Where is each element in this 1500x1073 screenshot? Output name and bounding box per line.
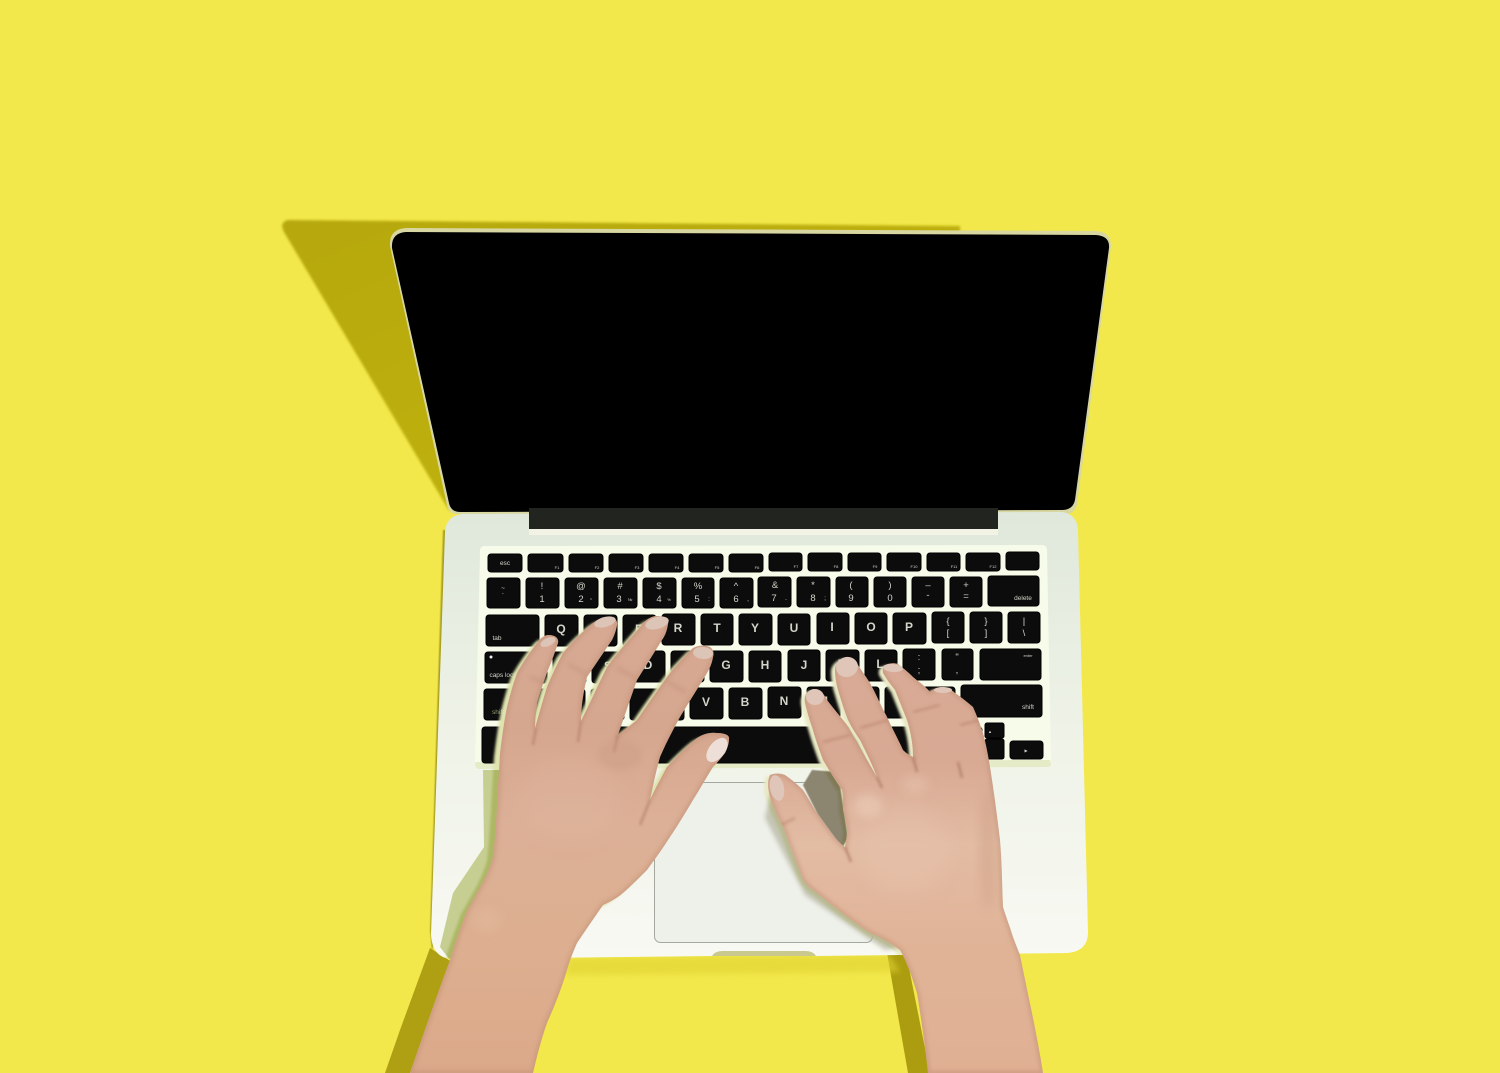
- scene: laptop and hands on yellow: [281, 218, 1111, 1073]
- number row: 5: [694, 594, 700, 605]
- number row: ;: [824, 595, 826, 602]
- function row: F3: [635, 565, 640, 570]
- qwerty row: I: [830, 620, 834, 634]
- home row: :: [918, 652, 920, 663]
- function row: F9: [873, 564, 878, 569]
- home row: caps lock: [489, 672, 517, 679]
- number row: 7: [771, 593, 777, 604]
- qwerty row: |: [1023, 616, 1025, 627]
- function row: [488, 552, 1039, 572]
- bottom letter row: M: [818, 694, 828, 708]
- qwerty row: R: [674, 621, 683, 635]
- function row: F10: [911, 564, 918, 569]
- number row: 3: [616, 594, 622, 605]
- qwerty row: U: [790, 621, 798, 635]
- number row: ,: [747, 596, 749, 603]
- front notch: [712, 951, 816, 956]
- number row: 6: [733, 594, 739, 605]
- number row: ~: [501, 585, 505, 592]
- home row: [485, 649, 1041, 683]
- number row: %: [667, 597, 671, 602]
- qwerty row: E: [635, 622, 643, 636]
- qwerty row: P: [905, 620, 913, 634]
- bottom letter row: shift: [492, 709, 504, 716]
- number row: delete: [1014, 595, 1032, 602]
- number row: 9: [848, 593, 854, 604]
- home row: ;: [918, 665, 920, 676]
- qwerty row: [486, 612, 1040, 646]
- qwerty row: Y: [751, 621, 759, 635]
- shadows under laptop and arms: [385, 530, 930, 1073]
- number row: !: [541, 581, 543, 592]
- right hand nails: [767, 654, 952, 802]
- qwerty row: \: [1023, 628, 1026, 639]
- number row: (: [849, 580, 853, 591]
- bottom letter row: shift: [1022, 704, 1034, 711]
- trackpad: [654, 782, 872, 942]
- bottom letter row: B: [741, 695, 750, 709]
- qwerty row: W: [594, 622, 606, 636]
- qwerty row: Q: [556, 622, 566, 636]
- function row: F6: [755, 565, 760, 570]
- number row: ^: [734, 581, 739, 592]
- home row: H: [761, 658, 769, 672]
- home row: K: [838, 657, 847, 671]
- space row and arrows: [482, 723, 1043, 763]
- number row: #: [617, 581, 623, 592]
- number row: -: [926, 590, 930, 601]
- laptop base: [431, 508, 1088, 959]
- number row: +: [963, 580, 969, 591]
- number row: №: [628, 597, 632, 602]
- qwerty row: tab: [492, 635, 502, 642]
- number row: .: [785, 595, 787, 602]
- home row: S: [604, 659, 612, 673]
- qwerty row: T: [713, 621, 721, 635]
- number row: `: [502, 593, 504, 600]
- space row and arrows: ▶: [1024, 748, 1028, 753]
- bottom letter row: [484, 685, 1042, 720]
- qwerty row: ]: [985, 628, 987, 639]
- bottom letter row: N: [780, 694, 788, 708]
- keyboard keys: [482, 552, 1043, 763]
- number row: 2: [578, 594, 584, 605]
- black screen: [392, 232, 1109, 512]
- function row: F8: [834, 564, 839, 569]
- lid rim: [390, 228, 1111, 514]
- keyboard well: [475, 545, 1051, 769]
- function row: F5: [715, 565, 720, 570]
- number row: –: [925, 580, 931, 591]
- hand cast shadows on laptop: [440, 618, 939, 959]
- number row: $: [656, 581, 662, 592]
- home row: ": [955, 652, 959, 663]
- number row: :: [708, 596, 710, 603]
- right hand: [767, 654, 1043, 1073]
- home row: enter: [1023, 653, 1033, 658]
- space row and arrows: ▲: [988, 729, 992, 734]
- function row: F11: [951, 564, 958, 569]
- qwerty row: {: [946, 616, 950, 627]
- hinge: [529, 508, 998, 529]
- home row: ,: [956, 665, 958, 676]
- qwerty row: [: [947, 628, 950, 639]
- left hand nails: [539, 614, 732, 766]
- function row: F1: [555, 565, 560, 570]
- function row: F12: [990, 564, 997, 569]
- number row: %: [694, 581, 703, 592]
- number row: 8: [810, 593, 816, 604]
- number row: 1: [539, 594, 545, 605]
- function row: F4: [675, 565, 680, 570]
- home row: F: [683, 658, 691, 672]
- number row: 0: [887, 593, 893, 604]
- bottom letter row: V: [702, 695, 710, 709]
- function row: esc: [500, 560, 511, 567]
- number row: *: [811, 580, 815, 591]
- home row: L: [876, 657, 884, 671]
- number row: =: [963, 591, 969, 602]
- home row: D: [644, 658, 653, 672]
- left hand: [410, 614, 732, 1073]
- lid cast shadow: [282, 220, 960, 512]
- number row: =: [590, 596, 593, 601]
- qwerty row: O: [866, 620, 876, 634]
- home row: A: [565, 659, 574, 673]
- home row: G: [721, 658, 731, 672]
- function row: F7: [794, 564, 799, 569]
- laptop lid: [390, 228, 1111, 514]
- qwerty row: }: [984, 616, 988, 627]
- number row: ): [888, 580, 892, 591]
- function row: F2: [595, 565, 600, 570]
- home row: J: [801, 658, 807, 672]
- number row: @: [576, 581, 586, 592]
- number row: 4: [656, 594, 662, 605]
- number row: &: [772, 580, 779, 591]
- number row: [487, 576, 1039, 608]
